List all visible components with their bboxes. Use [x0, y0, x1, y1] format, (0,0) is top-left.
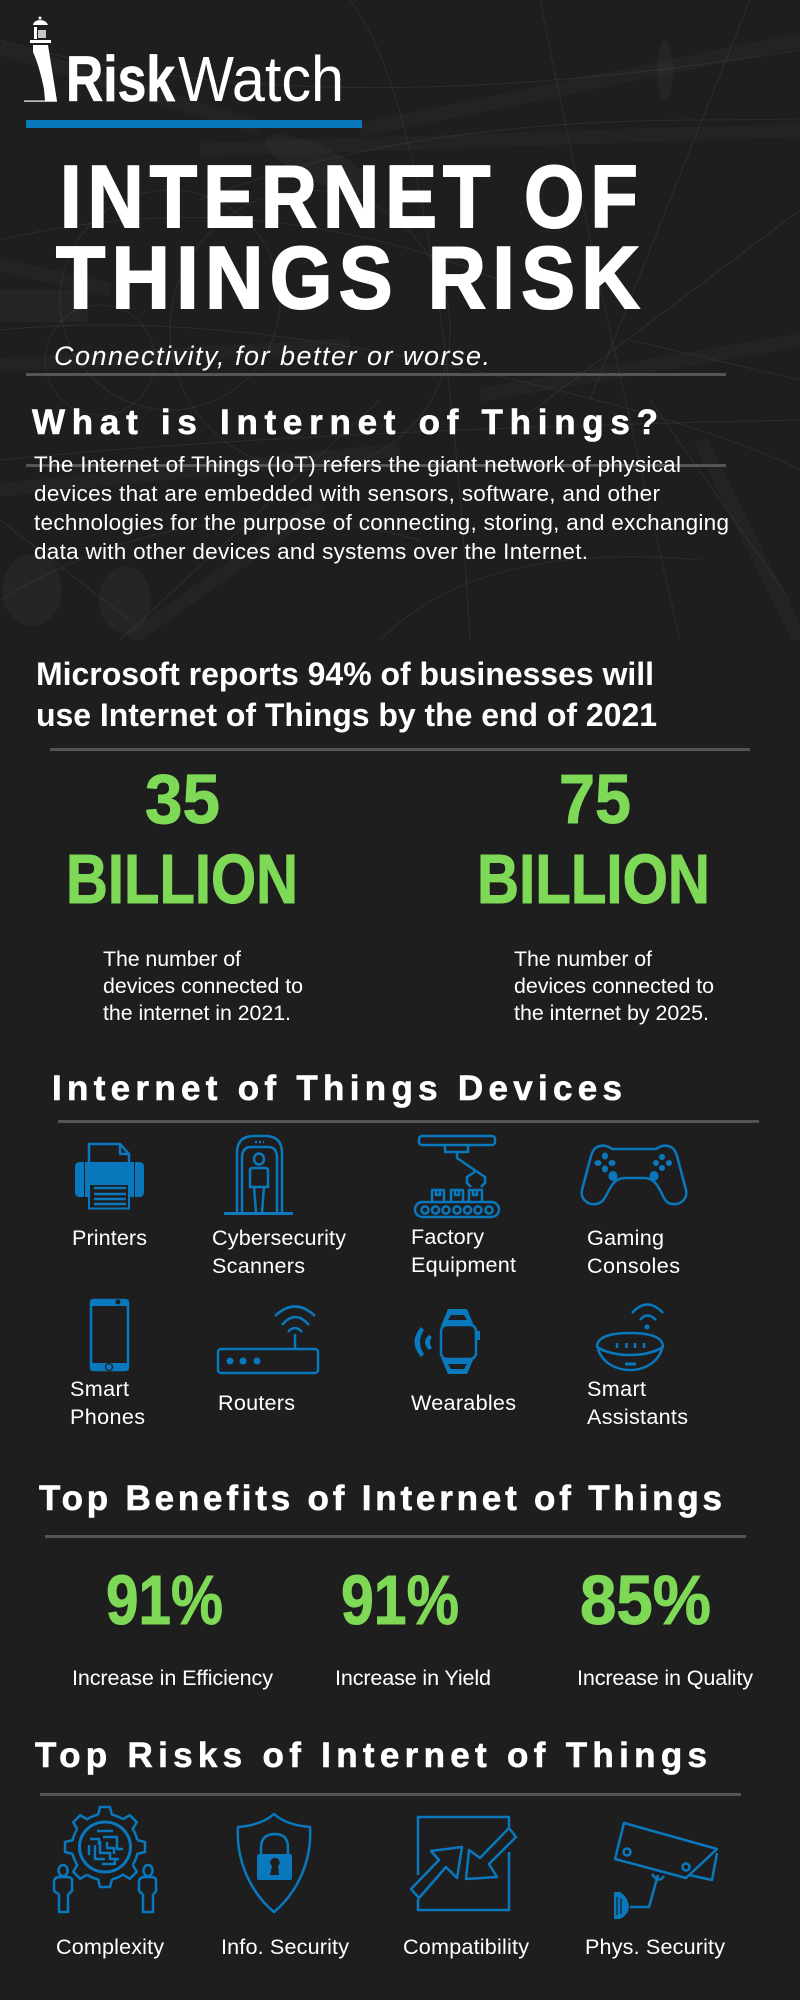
- figure left: [54, 1865, 72, 1912]
- label: [411, 1224, 516, 1277]
- body text: technologies for the purpose of connecting, storing, and exchanging: [34, 510, 729, 535]
- label: Scanners: [212, 1253, 305, 1278]
- stat: 35 billion: [66, 760, 303, 1025]
- label: Cybersecurity: [212, 1225, 346, 1250]
- label: [70, 1376, 145, 1429]
- label: Factory: [411, 1224, 484, 1249]
- label: Phones: [70, 1404, 145, 1429]
- label: Consoles: [587, 1253, 680, 1278]
- heading: Top Risks of Internet of Things: [35, 1736, 707, 1775]
- headline: Microsoft report: Microsoft reports 94% of businesses will: [36, 656, 654, 692]
- icon: complexity gear: [54, 1806, 156, 1912]
- title: THINGS RISK: [56, 228, 646, 327]
- wordmark: Risk: [66, 43, 175, 115]
- label: Routers: [218, 1390, 295, 1415]
- icon: game controller: [582, 1146, 686, 1204]
- logo: RiskWatch: Watch: [178, 43, 344, 115]
- body text: devices that are embedded with sensors, software, and other: [34, 481, 660, 506]
- body text: data with other devices and systems over the Internet.: [34, 539, 588, 564]
- panel: benefits: [39, 1479, 753, 1690]
- icon: shield with lock: [238, 1814, 310, 1912]
- body text: [34, 452, 729, 564]
- panel: risks: [35, 1736, 741, 1959]
- icon: factory equipment: [415, 1136, 499, 1217]
- label: Gaming: [587, 1225, 664, 1250]
- logo: RiskWatch: [24, 16, 344, 115]
- stat: efficiency: 91%: [106, 1561, 223, 1639]
- label: Printers: [72, 1225, 147, 1250]
- icon: security camera: [614, 1823, 717, 1919]
- icon: wearable watch: [414, 1309, 480, 1374]
- icon: smart assistant: [597, 1304, 663, 1370]
- heading: Top Benefits of Internet of Things: [39, 1479, 722, 1518]
- stat caption: the internet in 2021.: [103, 1001, 291, 1025]
- icon: router: [218, 1306, 318, 1373]
- stat: 75 billion: 75: [559, 760, 631, 838]
- label: Assistants: [587, 1404, 688, 1429]
- heading: Internet of Things Devices: [52, 1069, 622, 1108]
- stat: 35 billion: BILLION: [66, 840, 298, 918]
- stat: efficiency: [72, 1561, 273, 1690]
- stat: 35 billion: 35: [145, 760, 220, 838]
- stat: efficiency: Increase in Efficiency: [72, 1665, 273, 1690]
- label: [212, 1225, 346, 1278]
- stat caption: [514, 947, 714, 1025]
- stat: 75 billion: [477, 760, 714, 1025]
- headline: Microsoft report: use Internet of Things by the end of 2021: [36, 697, 657, 733]
- label: Info. Security: [221, 1934, 349, 1959]
- stat caption: The number of: [514, 947, 652, 971]
- stat caption: devices connected to: [514, 974, 714, 998]
- label: Wearables: [411, 1390, 516, 1415]
- title: [56, 147, 646, 327]
- subtitle: Connectivity, for better or worse.: [54, 341, 490, 371]
- label: Phys. Security: [585, 1934, 725, 1959]
- label: Equipment: [411, 1252, 516, 1277]
- stat caption: The number of: [103, 947, 241, 971]
- body text: The Internet of Things (IoT) refers the giant network of physical: [34, 452, 681, 477]
- label: Smart: [587, 1376, 646, 1401]
- headline: Microsoft report: [36, 656, 657, 733]
- stat caption: [103, 947, 303, 1025]
- stat: yield: [335, 1561, 491, 1690]
- label: [587, 1376, 688, 1429]
- stat caption: the internet by 2025.: [514, 1001, 709, 1025]
- heading: What is Internet of Things?: [32, 403, 658, 442]
- icon: smart phone: [90, 1299, 129, 1371]
- figure right: [139, 1865, 156, 1912]
- label: Smart: [70, 1376, 129, 1401]
- stat: 75 billion: BILLION: [477, 840, 710, 918]
- label: Compatibility: [403, 1934, 529, 1959]
- label: Complexity: [56, 1934, 164, 1959]
- stat: yield: 91%: [341, 1561, 459, 1639]
- title: INTERNET OF: [60, 147, 644, 246]
- panel: what is IoT: [26, 403, 729, 564]
- stat: quality: 85%: [580, 1561, 711, 1639]
- stat: yield: Increase in Yield: [335, 1665, 491, 1690]
- icon: cybersecurity scanner: [224, 1136, 293, 1215]
- logo underline bar: [26, 120, 362, 128]
- stat caption: devices connected to: [103, 974, 303, 998]
- icon: compatibility arrows: [411, 1817, 516, 1910]
- icon: printer: [75, 1144, 144, 1208]
- icon: lighthouse: [24, 16, 57, 102]
- stat: quality: [577, 1561, 753, 1690]
- panel: devices: [52, 1069, 759, 1429]
- label: [587, 1225, 680, 1278]
- stat: quality: Increase in Quality: [577, 1665, 753, 1690]
